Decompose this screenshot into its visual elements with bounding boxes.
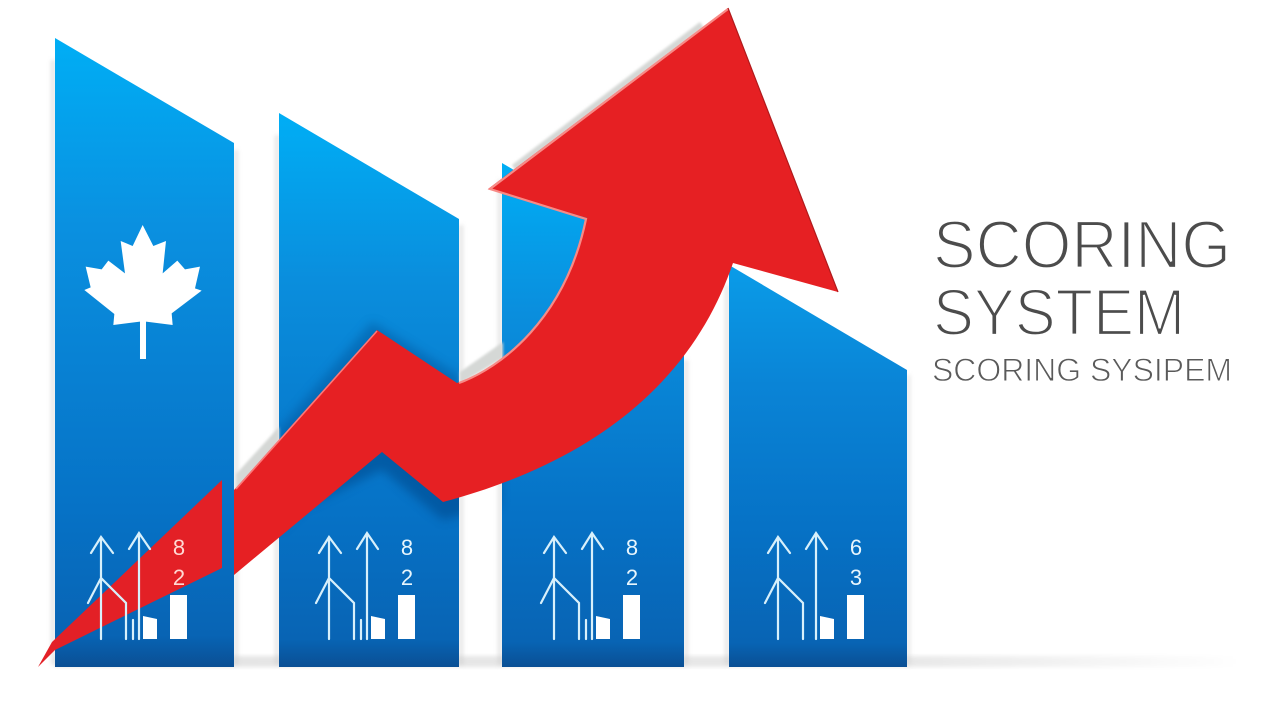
arrow tail segment [38,480,222,667]
icon group: column 2 indicators [316,533,415,639]
title line 1: SCORING [933,207,1231,283]
arrow shadow on columns [279,322,500,530]
icon group: column 3 indicators: 2 [626,565,638,590]
icon: maple leaf [84,225,202,359]
floor shadow [55,656,1245,667]
red arrow [38,8,838,667]
arrow dark edge [728,8,838,292]
icon group: column 1 indicators [88,533,187,639]
arrow highlight edges [236,331,377,489]
arrow highlight curve and head [459,9,728,383]
title block [932,207,1232,388]
arrow body and head [234,8,838,575]
column 2 [279,113,459,667]
title line 2: SYSTEM [933,275,1185,349]
subtitle: SCORING SYSIPEM [932,352,1232,388]
icon group: column 4 indicators [765,533,864,639]
column 1 [55,38,234,667]
column 3 [502,163,684,667]
icon group: column 3 indicators [541,533,640,639]
icon group: column 4 indicators: 3 [850,565,862,590]
icon group: column 4 indicators: 6 [850,535,862,560]
arrow upper-edge shadow on gaps [236,22,704,494]
icon group: column 1 indicators: 8 [173,535,185,560]
icon group: column 2 indicators: 8 [401,535,413,560]
column edge shadows [51,60,910,665]
column 4 [729,265,907,667]
icon group: column 2 indicators: 2 [401,565,413,590]
bar chart: four blue columns [55,38,907,667]
icon group: column 3 indicators: 8 [626,535,638,560]
icon group: column 1 indicators: 2 [173,565,185,590]
